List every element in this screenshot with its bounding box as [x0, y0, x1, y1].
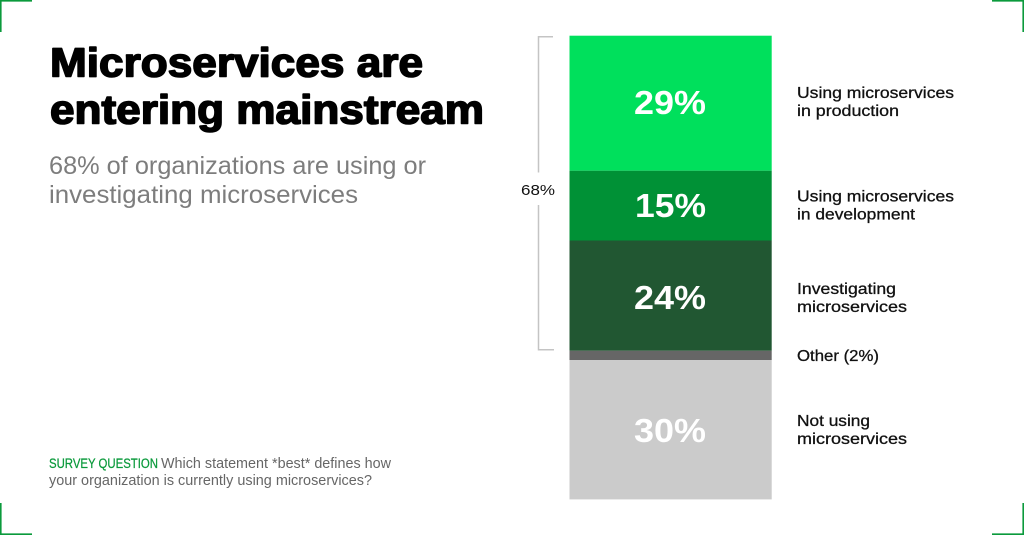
bracket: 68% total: 68% [521, 182, 555, 199]
title: Microservices are [50, 40, 423, 86]
segment: investigating 24% [570, 240, 772, 351]
subtitle [49, 152, 426, 209]
segment: not using 30%: 30% [634, 412, 706, 449]
title [50, 40, 484, 132]
subtitle: 68% of organizations are using or [49, 152, 426, 180]
segment: other 2% [570, 351, 772, 360]
survey question: Which statement *best* defines how [161, 456, 392, 472]
segment: investigating 24%: 24% [634, 279, 706, 316]
legend labels [797, 85, 954, 448]
label: not using [797, 413, 907, 448]
subtitle: investigating microservices [49, 181, 358, 209]
label: in production [797, 85, 954, 120]
segment: in production 29% [570, 36, 772, 171]
segment: in development 15% [570, 171, 772, 240]
label: investigating [797, 281, 907, 316]
label: not using: microservices [797, 431, 907, 448]
stacked bar chart [570, 36, 772, 499]
label: investigating: microservices [797, 299, 907, 316]
label: in production: in production [797, 103, 899, 120]
label: in development: Using microservices [797, 188, 954, 206]
label: other: Other (2%) [797, 348, 879, 365]
label: in development [797, 188, 954, 224]
segment: not using 30% [570, 360, 772, 499]
label: in production: Using microservices [797, 85, 954, 102]
survey question: SURVEY QUESTION [49, 456, 158, 471]
label: in development: in development [797, 206, 916, 224]
segment: in production 29%: 29% [634, 84, 706, 121]
label: not using: Not using [797, 413, 870, 430]
segment: in development 15%: 15% [635, 187, 706, 224]
survey question [49, 456, 392, 489]
label: investigating: Investigating [797, 281, 896, 298]
survey question: your organization is currently using microservices? [49, 473, 372, 489]
bracket: 68% total [521, 37, 555, 350]
title: entering mainstream [50, 86, 484, 132]
